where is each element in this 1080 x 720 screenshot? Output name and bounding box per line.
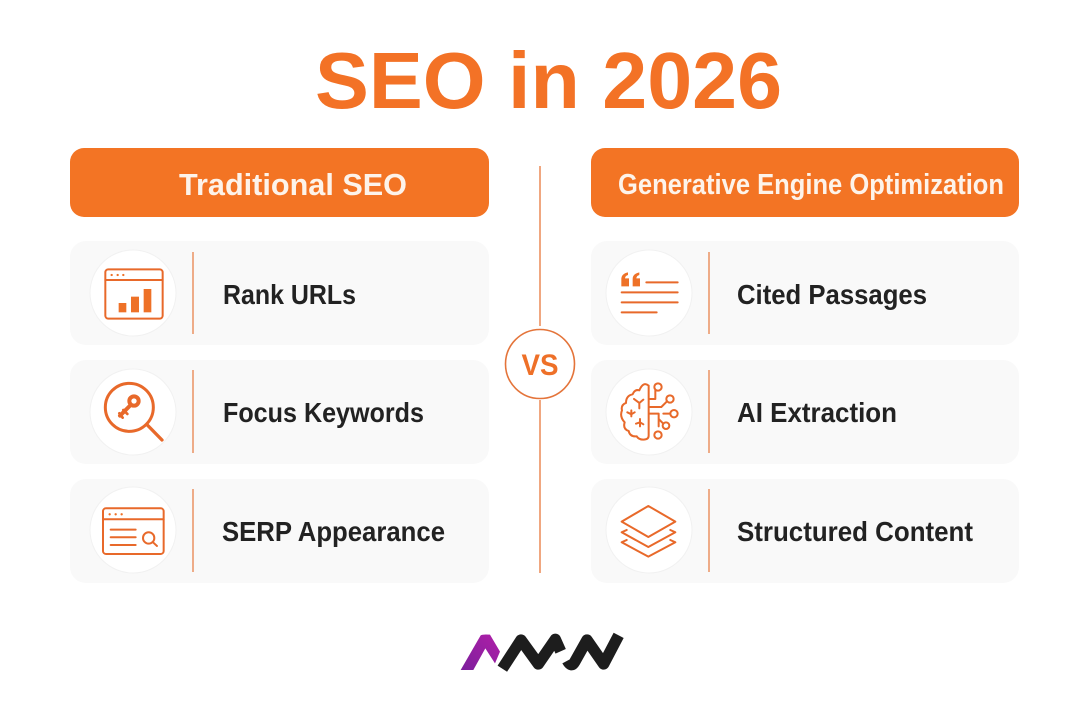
heading: Traditional SEO: Traditional SEO xyxy=(179,167,407,202)
row: Structured Content xyxy=(591,479,1019,583)
row: SERP Appearance: SERP Appearance xyxy=(222,516,445,547)
panel: Traditional SEO xyxy=(70,148,489,583)
icon: browser with bar chart xyxy=(105,269,163,319)
icon: brain with circuit nodes xyxy=(621,383,678,440)
row: Focus Keywords: Focus Keywords xyxy=(223,397,424,428)
row: Rank URLs: Rank URLs xyxy=(223,279,356,310)
row: Cited Passages: Cited Passages xyxy=(737,279,927,310)
logo xyxy=(461,634,619,670)
heading: Generative Engine Optimization: Generative Engine Optimization xyxy=(618,169,1004,201)
icon: magnifier with key xyxy=(105,383,162,440)
logo mark: purple peak xyxy=(461,634,500,670)
row: Focus Keywords xyxy=(70,360,489,464)
heading: Traditional SEO xyxy=(70,148,489,217)
row: Cited Passages xyxy=(591,241,1019,345)
row: AI Extraction: AI Extraction xyxy=(737,397,897,428)
title: SEO in 2026 xyxy=(315,36,782,125)
icon: search results page xyxy=(103,508,164,554)
VS badge xyxy=(506,330,574,398)
row: SERP Appearance xyxy=(70,479,489,583)
row: AI Extraction xyxy=(591,360,1019,464)
icon: stacked layers xyxy=(622,506,675,557)
row: Structured Content: Structured Content xyxy=(737,516,973,547)
row: Rank URLs xyxy=(70,241,489,345)
logo mark: black zigzag xyxy=(502,635,619,669)
heading: Generative Engine Optimization xyxy=(591,148,1019,217)
VS badge: VS xyxy=(522,349,558,382)
centre divider line xyxy=(539,166,541,573)
icon: quoted text lines xyxy=(621,272,678,312)
panel: Generative Engine Optimization xyxy=(591,148,1019,583)
